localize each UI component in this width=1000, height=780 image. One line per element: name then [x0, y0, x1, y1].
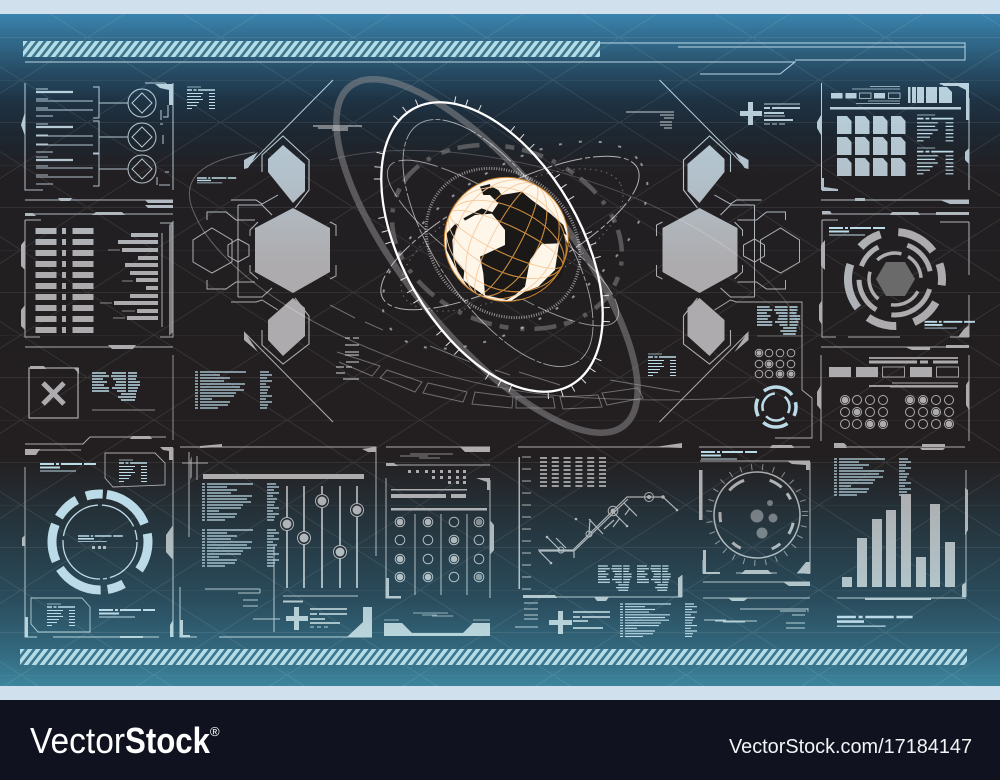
panel: line chart — [518, 443, 682, 601]
hex group right — [656, 80, 800, 422]
icon: close box — [29, 366, 79, 418]
radar circle — [709, 467, 805, 563]
bottom tab — [384, 623, 490, 636]
dashed grey ring — [366, 114, 648, 360]
small heading left — [197, 178, 236, 183]
panel: switch columns — [384, 447, 494, 636]
panel: top right tiles — [817, 83, 969, 204]
header bars — [831, 93, 885, 98]
status bars — [829, 367, 932, 377]
panel: right switches — [817, 345, 969, 447]
background bottom strip — [0, 686, 1000, 700]
panel: top left circles — [21, 83, 173, 190]
center left small data — [313, 126, 362, 379]
bars — [391, 489, 487, 510]
panel: data table — [21, 198, 173, 349]
table under chart — [620, 604, 697, 636]
line — [538, 492, 678, 564]
ring gauge — [44, 486, 156, 598]
orbit system behind — [189, 36, 800, 476]
panel: sliders — [180, 444, 376, 637]
footer logo: ® — [210, 724, 220, 739]
panel: center right data frame — [748, 302, 812, 438]
radar blips — [750, 500, 778, 538]
sliders — [280, 486, 364, 588]
footer logo: Stock — [125, 720, 211, 761]
globe rim — [444, 177, 568, 301]
panel: right ring gauge — [819, 211, 975, 337]
panel: radar — [699, 445, 810, 628]
switch circles — [395, 517, 484, 582]
perspective segments — [330, 305, 680, 409]
text block top right — [764, 104, 800, 124]
plus icon — [286, 607, 308, 630]
top hatched bar — [23, 41, 600, 57]
right column rows — [114, 233, 158, 320]
slider text — [202, 484, 279, 520]
inner dash orbit — [367, 90, 629, 396]
dotted orbit — [381, 140, 643, 340]
HUD interface — [20, 36, 975, 665]
switch dots — [840, 396, 954, 428]
triangle marks orbit — [348, 100, 682, 390]
plus icon top right — [740, 102, 762, 125]
chart notes — [598, 566, 632, 590]
globe — [444, 176, 569, 302]
footer band — [0, 700, 1000, 780]
continents — [447, 184, 569, 301]
panel: bottom left ring — [22, 436, 173, 638]
text under chart — [515, 603, 610, 628]
inset bottom — [31, 598, 90, 632]
grey outer ring — [288, 36, 686, 476]
footer logo: Vector — [30, 720, 125, 761]
globe wire grid light — [446, 179, 567, 300]
inset top — [105, 453, 165, 487]
dotted ring around globe — [396, 137, 610, 349]
tilted orbit b — [368, 135, 638, 351]
hex group left — [193, 80, 336, 422]
dots — [408, 470, 466, 484]
tile grid — [837, 116, 906, 176]
small text block top — [187, 87, 215, 108]
small lines top center right — [626, 112, 674, 128]
text block center right — [648, 354, 676, 376]
axis ticks — [522, 457, 531, 589]
plus icon chart — [549, 611, 572, 634]
background top strip — [0, 0, 1000, 14]
dot matrix — [755, 349, 795, 378]
ring dots — [92, 546, 106, 549]
tile side text — [917, 115, 953, 141]
ring gauge — [844, 228, 946, 330]
left column rows — [36, 228, 94, 333]
heading text — [40, 464, 96, 471]
footer logo — [30, 720, 220, 761]
tilted orbit a — [362, 127, 658, 339]
data grid — [540, 458, 607, 486]
panel: bar chart — [834, 445, 968, 626]
bottom hatched bar — [20, 649, 967, 665]
top header lines — [25, 43, 965, 74]
small ring gauge — [753, 384, 799, 430]
orbit tick marks — [330, 59, 654, 435]
icon: three diamond circles — [128, 89, 156, 183]
bars — [842, 494, 955, 587]
globe wire grid on dark land — [480, 186, 567, 299]
text block beside close box — [92, 373, 140, 400]
text lines — [36, 89, 170, 185]
footer id: VectorStock.com/17184147 — [729, 735, 972, 758]
main white orbit ring — [335, 65, 649, 429]
text table left center — [195, 372, 272, 408]
